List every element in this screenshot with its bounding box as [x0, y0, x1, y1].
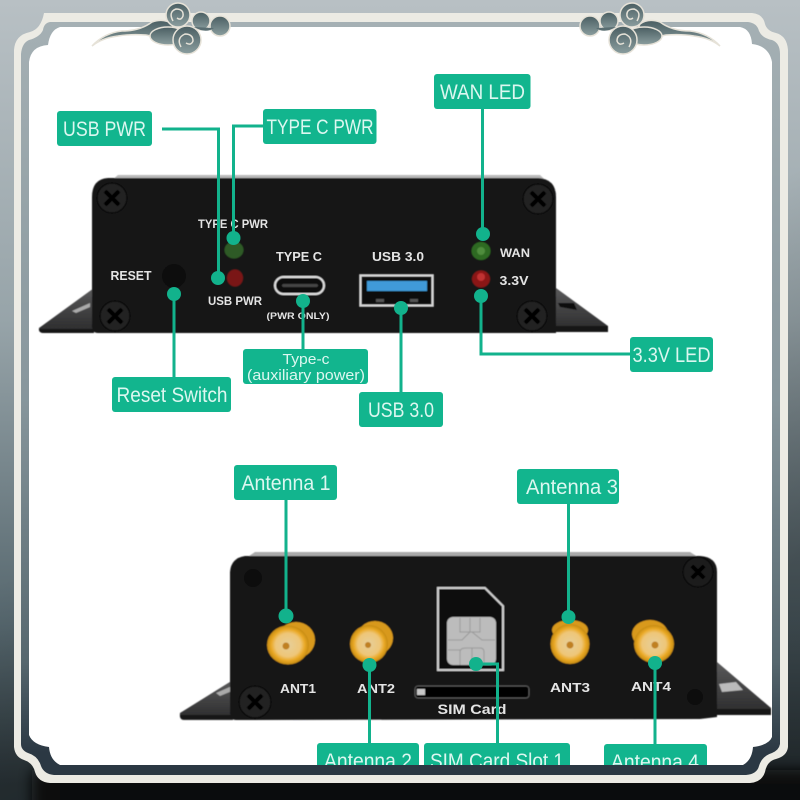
antenna connectors — [267, 620, 674, 664]
label: Antenna 2 — [317, 743, 419, 765]
label: Antenna 1: Antenna 1 — [242, 472, 330, 495]
device text: antenna panel: ANT2 — [357, 681, 395, 696]
device text: front panel: (PWR ONLY) — [266, 311, 330, 322]
device text: front panel: RESET — [110, 269, 152, 283]
device text: antenna panel: ANT3 — [550, 680, 590, 695]
device text: front panel: 3.3V — [500, 274, 529, 288]
label: USB PWR — [57, 111, 152, 146]
body — [92, 178, 556, 333]
bottom labels clipped by the frame — [317, 743, 707, 765]
label: TYPE C PWR: TYPE C PWR — [266, 116, 374, 139]
label: Antenna 2: Antenna 2 — [324, 750, 412, 773]
device text: antenna panel: SIM Card — [438, 701, 506, 717]
label: 3.3V LED — [630, 337, 713, 372]
device: front panel — [39, 175, 608, 333]
label: 3.3V LED: 3.3V LED — [632, 344, 710, 367]
device text: antenna panel — [280, 679, 672, 717]
device text: front panel: WAN — [500, 248, 530, 260]
label: Type-c auxiliary power — [243, 349, 368, 384]
device text: front panel: USB PWR — [208, 296, 263, 308]
label: Antenna 3: Antenna 3 — [526, 476, 618, 499]
connector lines and dots — [162, 108, 662, 745]
reset button — [162, 264, 186, 288]
label: TYPE C PWR — [263, 109, 376, 144]
device: antenna panel — [180, 552, 771, 720]
device text: antenna panel: ANT4 — [631, 679, 672, 694]
label: Antenna 4 — [604, 744, 707, 765]
Type C port — [275, 277, 324, 294]
device text: antenna panel: ANT1 — [280, 681, 316, 696]
label: Antenna 1 — [234, 465, 337, 500]
USB port — [360, 276, 432, 306]
label: WAN LED — [434, 74, 530, 109]
label: USB 3.0 — [359, 392, 443, 427]
SIM slot — [415, 686, 529, 698]
label: USB 3.0: USB 3.0 — [368, 399, 434, 422]
LEDs — [224, 242, 490, 288]
label: Antenna 3 — [517, 469, 619, 504]
device text: front panel: TYPE C PWR — [198, 219, 269, 231]
flanges — [180, 680, 233, 720]
screws — [97, 183, 553, 331]
label: Reset Switch — [112, 377, 231, 412]
device text: front panel: USB 3.0 — [372, 249, 424, 264]
SIM outline — [438, 588, 503, 670]
label: WAN LED: WAN LED — [440, 81, 525, 104]
ornament: left cloud — [92, 3, 230, 54]
label: Antenna 4: Antenna 4 — [611, 751, 699, 774]
label: Type-c auxiliary power: Type-c — [282, 351, 330, 368]
body — [230, 556, 717, 720]
label: USB PWR: USB PWR — [63, 118, 146, 141]
holes and screws — [244, 569, 262, 587]
device text: front panel: TYPE C — [276, 250, 322, 264]
flanges — [39, 288, 94, 333]
label: Type-c auxiliary power: (auxiliary power) — [247, 367, 365, 384]
label: SIM Card Slot 1: SIM Card Slot 1 — [430, 750, 564, 773]
ornament: right cloud — [580, 3, 720, 54]
label: SIM Card Slot 1 — [424, 743, 570, 765]
device text: front panel — [110, 219, 530, 322]
SIM chip — [447, 617, 496, 665]
label: Reset Switch: Reset Switch — [116, 384, 228, 407]
